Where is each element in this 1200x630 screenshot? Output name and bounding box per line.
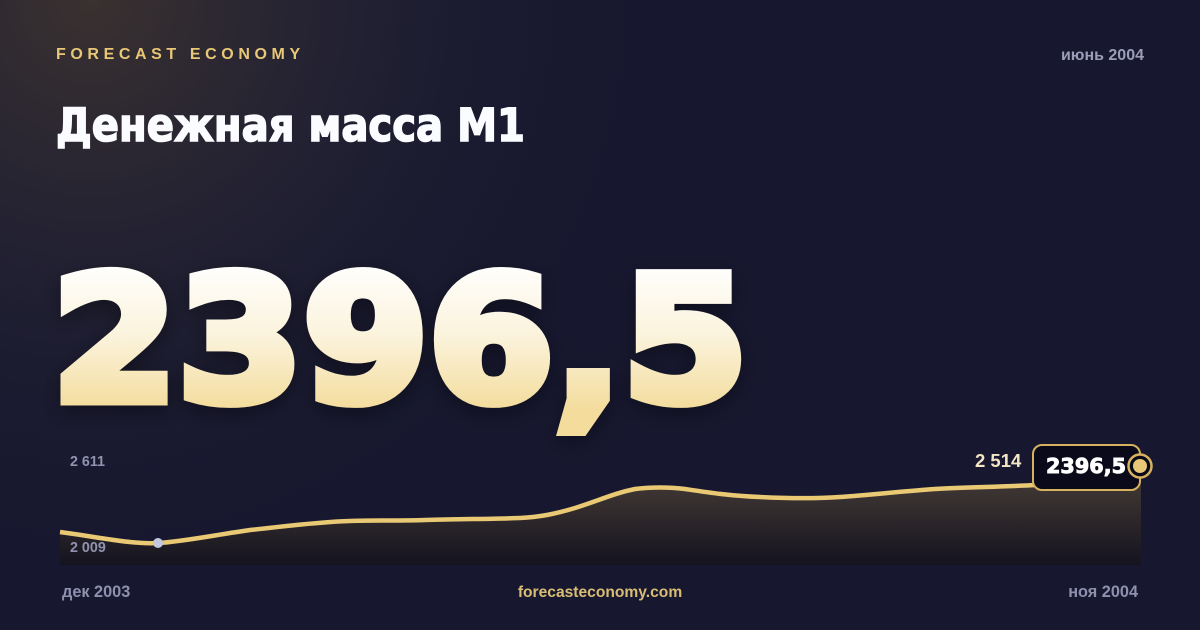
date label: июнь 2004 bbox=[1061, 47, 1144, 64]
current value badge: 2396,5 bbox=[1046, 454, 1126, 478]
start date: дек 2003 bbox=[62, 583, 130, 601]
peak label: 2 514 bbox=[975, 450, 1022, 471]
big value: 2396 bbox=[52, 240, 531, 441]
axis min label: 2 009 bbox=[70, 540, 106, 556]
chart: money supply sparkline bbox=[60, 445, 1152, 565]
current value badge bbox=[1033, 445, 1140, 490]
title: Денежная масса М1 bbox=[56, 99, 525, 152]
big value: , bbox=[554, 246, 622, 447]
axis max label: 2 611 bbox=[70, 454, 105, 470]
price line bbox=[60, 485, 1035, 543]
big value: 5 bbox=[622, 240, 748, 441]
end date: ноя 2004 bbox=[1068, 583, 1138, 601]
current value marker bbox=[1128, 454, 1152, 478]
site url: forecasteconomy.com bbox=[518, 584, 682, 601]
area under line bbox=[60, 466, 1141, 565]
minimum marker bbox=[153, 538, 163, 548]
brand label: FORECAST ECONOMY bbox=[56, 46, 305, 63]
